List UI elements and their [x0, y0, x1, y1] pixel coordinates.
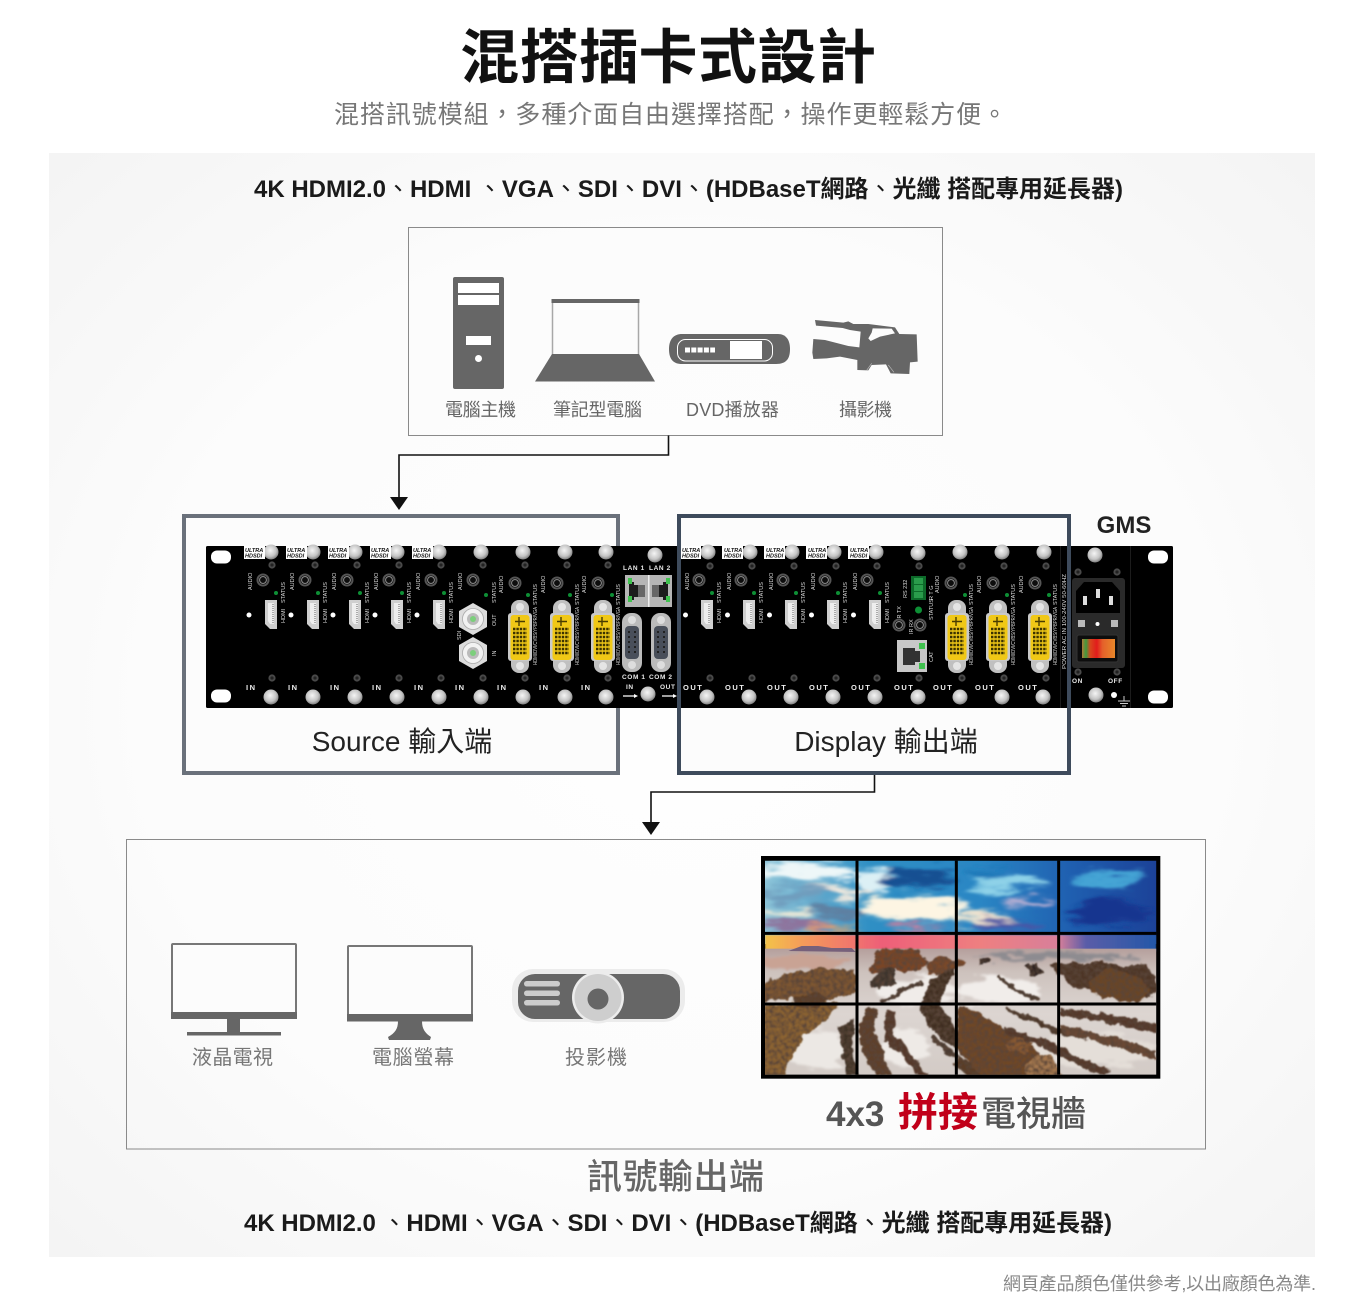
footnote: 網頁產品顏色僅供參考,以出廠顏色為準.	[1003, 1273, 1316, 1294]
output HDMI cards	[681, 544, 1052, 704]
LAN and COM control ports: IN	[626, 684, 634, 691]
input HDMI cards: AUDIO	[248, 572, 254, 590]
input HDMI cards	[244, 544, 662, 704]
input HDMI cards: ULTRA	[413, 548, 431, 554]
LAN and COM control ports: COM 2	[649, 674, 673, 681]
input HDMI cards: HDMI	[407, 608, 413, 623]
LAN and COM control ports: LAN 1	[623, 565, 645, 572]
input HDMI cards: ULTRA	[329, 548, 347, 554]
input HDMI cards: STATUS	[449, 582, 455, 603]
input DVI cards: AUDIO	[582, 575, 588, 593]
arrow: source to input	[390, 436, 668, 510]
input HDMI cards: STATUS	[407, 582, 413, 603]
label: 4x3 video wall: 4x3	[826, 1095, 884, 1134]
background panel	[49, 153, 1315, 1257]
icon: camcorder	[812, 320, 918, 374]
output HDMI cards: ULTRA	[766, 548, 784, 554]
output HDMI cards: ULTRA	[808, 548, 826, 554]
LAN and COM control ports	[622, 565, 677, 698]
rack ear holes	[211, 550, 1168, 704]
label: camcorder: 攝影機	[839, 400, 892, 420]
power module: OFF	[1108, 678, 1123, 685]
output HDMI cards: AUDIO	[769, 572, 775, 590]
output HDMI cards: STATUS	[717, 582, 723, 603]
HDBaseT control card: R T G	[929, 586, 935, 600]
input HDMI cards: HDSDI	[245, 554, 263, 560]
input HDMI cards: HDSDI	[413, 554, 431, 560]
output HDMI cards: OUT	[809, 683, 829, 692]
icon: DVD player	[669, 334, 790, 364]
input DVI cards: STATUS	[533, 584, 539, 605]
SDI card: STATUS	[492, 582, 498, 603]
output HDMI cards: AUDIO	[811, 572, 817, 590]
input HDMI cards: HDSDI	[287, 554, 305, 560]
input HDMI cards: AUDIO	[332, 572, 338, 590]
LAN and COM control ports: COM 1	[622, 674, 646, 681]
output HDMI cards: HDSDI	[682, 554, 700, 560]
input HDMI cards: AUDIO	[416, 572, 422, 590]
output DVI cards: STATUS	[1053, 584, 1059, 605]
output DVI cards: AUDIO	[977, 575, 983, 593]
input HDMI cards: IN	[581, 683, 592, 692]
input HDMI cards: ULTRA	[371, 548, 389, 554]
heading: signal output: 訊號輸出端	[587, 1158, 764, 1197]
SDI card: OUT	[492, 614, 498, 626]
power module: ON	[1072, 678, 1083, 685]
input HDMI cards: IN	[539, 683, 550, 692]
label: desktop: 電腦主機	[445, 400, 516, 420]
input DVI cards: STATUS	[616, 584, 622, 605]
output HDMI cards: STATUS	[885, 582, 891, 603]
HDBaseT control card: IR RX	[909, 619, 915, 634]
output HDMI cards: HDSDI	[766, 554, 784, 560]
label: GMS: GMS	[1097, 512, 1151, 539]
label: 4x3 video wall: 拼接	[898, 1091, 978, 1135]
input HDMI cards: STATUS	[323, 582, 329, 603]
output HDMI cards: OUT	[683, 683, 703, 692]
output HDMI cards: HDMI	[801, 608, 807, 623]
output HDMI cards: HDMI	[843, 608, 849, 623]
input HDMI cards: IN	[497, 683, 508, 692]
output HDMI cards: AUDIO	[727, 572, 733, 590]
output HDMI cards: HDSDI	[808, 554, 826, 560]
label: source input: Source 輸入端	[312, 726, 492, 757]
LAN and COM control ports: OUT	[660, 684, 676, 691]
HDBaseT control card: RS 232	[903, 580, 909, 598]
label: computer monitor: 電腦螢幕	[372, 1046, 454, 1069]
label: DVD player: DVD播放器	[686, 400, 779, 420]
input DVI cards: STATUS	[575, 584, 581, 605]
output DVI cards: HDMI/DVI/CVBS/YPBPR/VGA	[1053, 607, 1059, 665]
label: display output: Display 輸出端	[794, 726, 978, 757]
output HDMI cards: OUT	[1018, 683, 1038, 692]
input HDMI cards: AUDIO	[374, 572, 380, 590]
label: 4x3 video wall: 電視牆	[981, 1095, 1086, 1134]
label: laptop: 筆記型電腦	[553, 400, 642, 420]
HDBaseT control card: STATUS	[929, 599, 935, 620]
output DVI cards: AUDIO	[935, 575, 941, 593]
input DVI cards: HDMI/DVI/CVBS/YPBPR/VGA	[533, 607, 539, 665]
power module	[1060, 546, 1130, 708]
output HDMI cards: HDMI	[885, 608, 891, 623]
input HDMI cards: AUDIO	[458, 572, 464, 590]
output HDMI cards: HDMI	[717, 608, 723, 623]
input HDMI cards: IN	[455, 683, 466, 692]
input HDMI cards: HDMI	[323, 608, 329, 623]
output DVI cards: STATUS	[969, 584, 975, 605]
SDI card	[457, 582, 498, 669]
output HDMI cards: AUDIO	[853, 572, 859, 590]
output DVI cards: HDMI/DVI/CVBS/YPBPR/VGA	[1011, 607, 1017, 665]
icon: projector	[512, 969, 685, 1024]
SDI card: IN	[492, 650, 498, 656]
input DVI cards: AUDIO	[541, 575, 547, 593]
label: projector: 投影機	[565, 1046, 627, 1069]
icon: desktop tower	[453, 277, 504, 389]
input formats heading: 4K HDMI2.0、HDMI 、VGA、SDI、DVI、(HDBaseT網路、光纖 搭配專用延長器)	[254, 176, 1123, 203]
HDBaseT control card	[892, 576, 935, 672]
panel: source input frame	[184, 516, 618, 773]
input HDMI cards: STATUS	[281, 582, 287, 603]
input HDMI cards: HDMI	[281, 608, 287, 623]
input HDMI cards: IN	[288, 683, 298, 692]
output formats text: 4K HDMI2.0 、HDMI、VGA、SDI、DVI、(HDBaseT網路、光纖 搭配專用延長器)	[244, 1210, 1112, 1237]
input DVI cards: HDMI/DVI/CVBS/YPBPR/VGA	[616, 607, 622, 665]
arrow: output to displays	[642, 775, 874, 835]
output HDMI cards: OUT	[975, 683, 995, 692]
output DVI cards: HDMI/DVI/CVBS/YPBPR/VGA	[969, 607, 975, 665]
power module: POWER AC IN 100-240V 50-60HZ	[1062, 573, 1068, 669]
input HDMI cards: IN	[330, 683, 340, 692]
HDBaseT control card: CAT	[929, 651, 935, 662]
input HDMI cards: HDSDI	[371, 554, 389, 560]
output HDMI cards: OUT	[767, 683, 787, 692]
output HDMI cards: STATUS	[801, 582, 807, 603]
input HDMI cards: ULTRA	[287, 548, 305, 554]
output HDMI cards: HDSDI	[850, 554, 868, 560]
output HDMI cards: OUT	[725, 683, 745, 692]
output DVI cards: AUDIO	[1019, 575, 1025, 593]
icon: LCD TV	[171, 944, 297, 1036]
input HDMI cards: ULTRA	[245, 548, 263, 554]
input HDMI cards: IN	[372, 683, 382, 692]
input HDMI cards: IN	[246, 683, 256, 692]
HDBaseT control card: IR TX	[897, 606, 903, 620]
icon: computer monitor	[347, 946, 473, 1040]
icon: laptop	[535, 299, 655, 382]
input HDMI cards: HDSDI	[329, 554, 347, 560]
output HDMI cards: OUT	[933, 683, 953, 692]
panel: output devices	[126, 840, 1206, 1149]
output DVI cards: STATUS	[1011, 584, 1017, 605]
output HDMI cards: OUT	[894, 683, 914, 692]
input DVI cards: HDMI/DVI/CVBS/YPBPR/VGA	[575, 607, 581, 665]
output HDMI cards: ULTRA	[682, 548, 700, 554]
output HDMI cards: OUT	[851, 683, 871, 692]
output HDMI cards: HDSDI	[724, 554, 742, 560]
SDI card: SDI	[457, 630, 463, 640]
LAN and COM control ports: LAN 2	[649, 565, 671, 572]
output DVI cards	[935, 575, 1059, 673]
output HDMI cards: AUDIO	[685, 572, 691, 590]
label: LCD TV: 液晶電視	[192, 1046, 273, 1069]
input DVI cards	[499, 575, 622, 673]
panel: display output frame background	[679, 516, 1069, 773]
input HDMI cards: IN	[414, 683, 424, 692]
input HDMI cards: HDMI	[449, 608, 455, 623]
title: 混搭插卡式設計	[460, 25, 876, 91]
output HDMI cards: ULTRA	[850, 548, 868, 554]
output HDMI cards: STATUS	[759, 582, 765, 603]
input HDMI cards: STATUS	[365, 582, 371, 603]
input DVI cards: AUDIO	[499, 575, 505, 593]
input HDMI cards: AUDIO	[290, 572, 296, 590]
output HDMI cards: HDMI	[759, 608, 765, 623]
video wall photo	[735, 856, 1160, 1083]
output HDMI cards: STATUS	[843, 582, 849, 603]
panel: source devices	[408, 228, 942, 436]
input HDMI cards: HDMI	[365, 608, 371, 623]
output HDMI cards: ULTRA	[724, 548, 742, 554]
chassis rear panel	[206, 544, 1173, 708]
panel: display output frame	[679, 516, 1069, 773]
subtitle: 混搭訊號模組，多種介面自由選擇搭配，操作更輕鬆方便。	[334, 101, 1007, 129]
